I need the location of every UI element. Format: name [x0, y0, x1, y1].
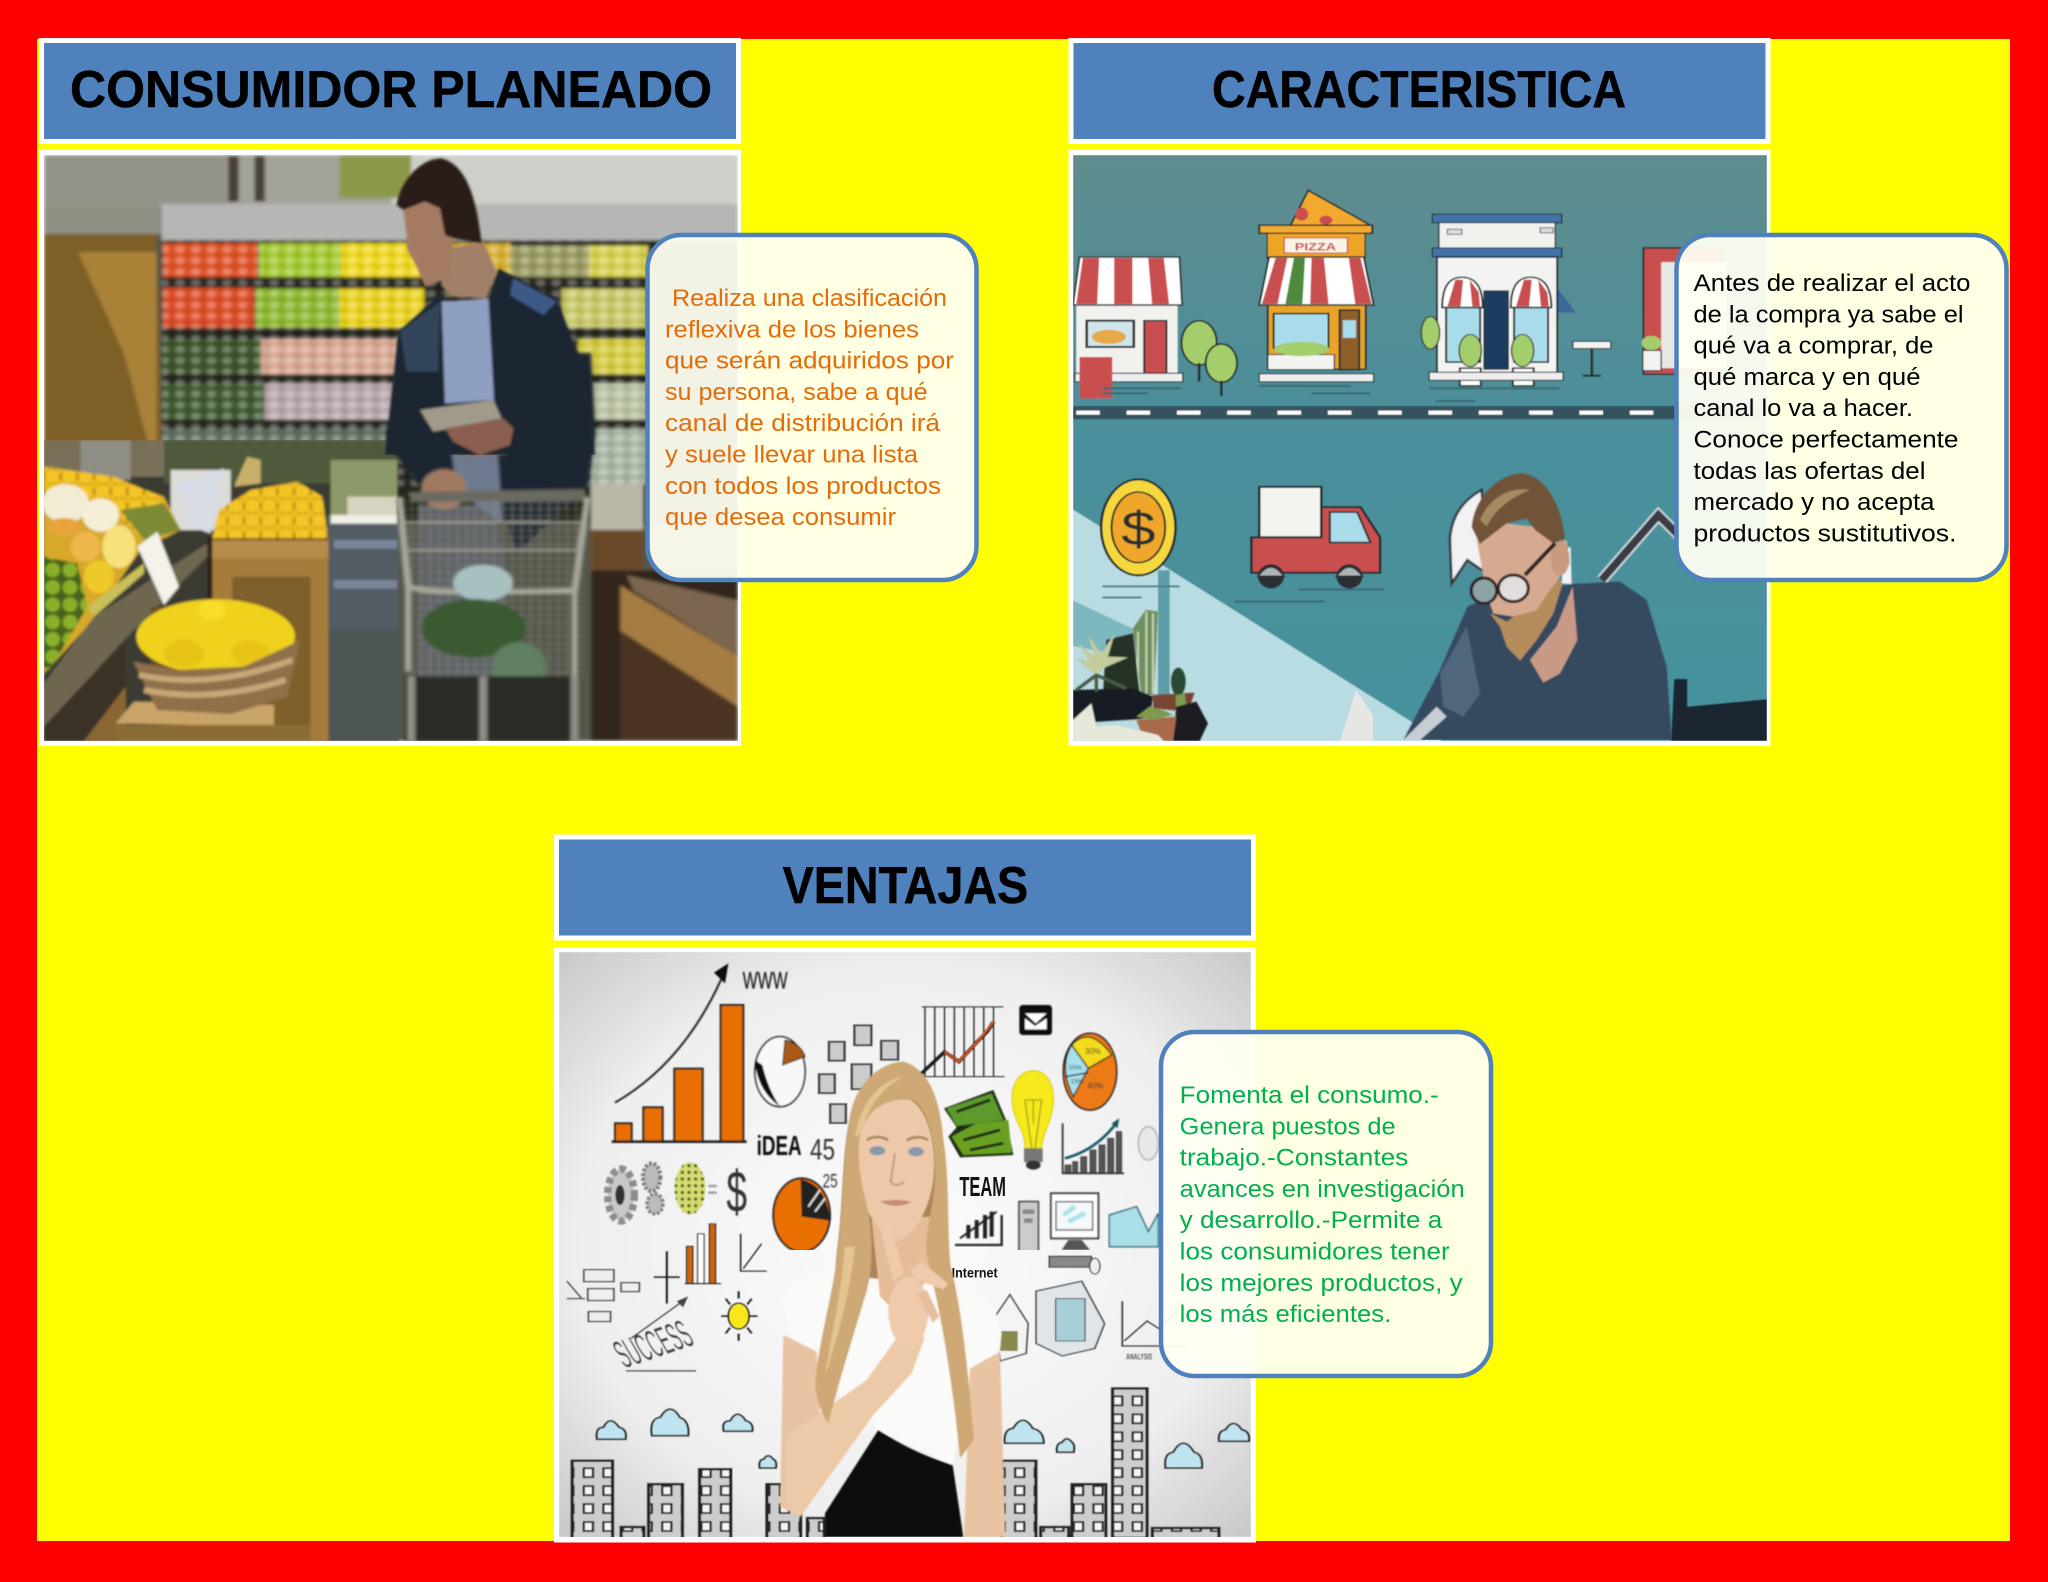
laptop corner — [1340, 690, 1373, 741]
light beam — [1073, 510, 1442, 741]
analysis line chart — [1122, 1301, 1186, 1361]
callout: caracteristica text: Antes de realizar el acto — [1694, 270, 1970, 297]
callout: ventajas text: trabajo.-Constantes — [1180, 1145, 1408, 1172]
callout: ventajas text: Fomenta el consumo.- — [1180, 1082, 1439, 1109]
3d pie sketch — [755, 1037, 805, 1107]
coin — [1101, 479, 1176, 575]
percentage pie chart: 40% — [1087, 1081, 1103, 1090]
callout: consumidor planeado text: reflexiva de los bienes — [665, 316, 919, 343]
percentage pie chart: 30% — [1085, 1047, 1101, 1056]
callout: caracteristica text: Conoce perfectamente — [1694, 426, 1958, 454]
sun — [721, 1291, 758, 1341]
callout: consumidor planeado text: y suele llevar una lista — [665, 442, 918, 468]
callout: ventajas text: y desarrollo.-Permite a — [1180, 1207, 1443, 1234]
callout: ventajas text: Genera puestos de — [1180, 1113, 1396, 1140]
callout: caracteristica text: productos sustitutivos. — [1694, 520, 1956, 547]
photo frame: shops illustration — [1071, 152, 1768, 744]
photo frame: shopper in supermarket — [42, 152, 738, 744]
heading: caracteristica: CARACTERISTICA — [1212, 60, 1626, 118]
callout: caracteristica text: de la compra ya sabe el — [1694, 301, 1964, 328]
dollar sign: $ — [726, 1160, 747, 1225]
shop 2: pizza: PIZZA — [1295, 240, 1336, 253]
callout: ventajas text: los mejores productos, y — [1180, 1270, 1463, 1297]
seed cluster — [675, 1162, 705, 1214]
chair — [1671, 679, 1767, 741]
percentage pie chart: 15% — [1068, 1064, 1082, 1071]
heading: consumidor planeado — [42, 40, 738, 142]
callout: caracteristica text: todas las ofertas del — [1694, 458, 1926, 485]
photo: thinking woman with money and team doodles — [779, 1060, 1014, 1537]
callout: consumidor planeado text: Realiza una clasificación — [672, 285, 947, 312]
analysis line chart: ANALYSIS — [1126, 1353, 1152, 1361]
clouds — [597, 1409, 1249, 1468]
panel: caracteristica — [1071, 40, 2006, 744]
callout: consumidor planeado text — [648, 235, 976, 580]
computer tower — [1019, 1202, 1038, 1255]
panel: ventajas — [556, 837, 1491, 1542]
callout: ventajas text: los consumidores tener — [1180, 1238, 1450, 1266]
callout: caracteristica text: qué marca y en qué — [1694, 364, 1920, 391]
illustration: bearded man with glasses — [1403, 472, 1674, 740]
aisle floor — [327, 515, 399, 741]
grid line chart — [920, 1007, 1005, 1077]
internet label: Internet — [952, 1264, 998, 1280]
illustration: potted plants — [1073, 609, 1209, 741]
illustration: business doodles background — [559, 952, 1251, 1537]
house sketch — [994, 1281, 1105, 1361]
cart — [405, 500, 584, 676]
small team chart — [955, 1212, 1002, 1245]
success doodle: SUCCESS — [605, 1312, 700, 1376]
basket lemons — [136, 599, 295, 674]
blue area chart — [1109, 1207, 1158, 1247]
arrowhead — [714, 963, 728, 983]
percentage pie chart — [1063, 1033, 1117, 1110]
callout: caracteristica text — [1676, 235, 2006, 580]
callout: caracteristica text: mercado y no acepta — [1694, 489, 1935, 516]
growth curve — [615, 978, 722, 1103]
flow diagram — [567, 1270, 639, 1322]
lemon stall — [207, 537, 327, 741]
table under basket — [116, 702, 274, 727]
www label: WWW — [743, 967, 788, 994]
photo: fruit stall with lemons and basket — [44, 440, 400, 741]
photo: supermarket shelves background — [44, 155, 738, 741]
illustration: shops, road, coin, truck — [1073, 155, 1767, 741]
road — [1073, 406, 1767, 419]
woman figure — [780, 1062, 1005, 1537]
right bins — [591, 570, 738, 741]
money pile — [944, 1090, 1013, 1157]
callout: ventajas text: los más eficientes. — [1180, 1301, 1391, 1328]
callout: consumidor planeado text: su persona, sabe a qué — [665, 379, 928, 406]
idea label: iDEA — [757, 1130, 802, 1161]
doodles: envelope, pie, bulb, chart, computer — [1010, 1004, 1159, 1250]
panel: consumidor planeado — [42, 40, 976, 744]
car sketch — [1138, 1127, 1158, 1160]
heading: ventajas: VENTAJAS — [783, 856, 1028, 914]
orange pie chart — [773, 1178, 830, 1252]
shop 4 — [1643, 248, 1722, 374]
envelope icon — [1019, 1005, 1052, 1035]
shop 2: pizza — [1259, 190, 1374, 382]
callout: caracteristica text: canal lo va a hacer. — [1694, 395, 1913, 422]
light bulb — [1012, 1071, 1053, 1170]
coin: $ — [1121, 502, 1156, 555]
equals sign — [708, 1186, 717, 1193]
truck — [1251, 487, 1380, 588]
heading: consumidor planeado: CONSUMIDOR PLANEADO — [70, 60, 712, 118]
callout: ventajas text: avances en investigación — [1180, 1176, 1465, 1203]
keyboard and mouse — [1049, 1256, 1100, 1274]
photo frame: business doodles — [556, 950, 1254, 1540]
doodles: growth chart, pie, idea, gears, dollar, orange pie — [603, 962, 838, 1250]
callout: consumidor planeado text: que desea consumir — [665, 504, 896, 531]
shop 3 — [1421, 214, 1611, 386]
photo: man with shopping cart — [394, 350, 598, 741]
monitor — [1051, 1193, 1098, 1250]
network icons — [819, 1025, 898, 1123]
mini bar chart with trend — [1063, 1118, 1124, 1173]
callout: ventajas text — [1161, 1032, 1491, 1376]
callout: consumidor planeado text: con todos los productos — [665, 473, 941, 500]
bar chart with cross — [654, 1224, 767, 1304]
success doodle — [605, 1296, 700, 1376]
skyline buildings — [572, 1388, 1219, 1542]
gears — [608, 1163, 663, 1221]
photo: man's head and jacket — [384, 156, 597, 455]
callout: consumidor planeado text: que serán adquiridos por — [665, 348, 954, 375]
percentage pie chart: 15% — [1071, 1078, 1084, 1085]
callout: caracteristica text: qué va a comprar, de — [1694, 333, 1934, 360]
heading: ventajas — [556, 837, 1254, 938]
growth bars — [615, 1005, 743, 1142]
price card — [137, 532, 179, 605]
shop 1 — [1073, 257, 1237, 398]
callout: consumidor planeado text: canal de distribución irá — [665, 410, 940, 437]
heading: caracteristica — [1071, 40, 1768, 142]
left fruit display — [44, 467, 181, 673]
